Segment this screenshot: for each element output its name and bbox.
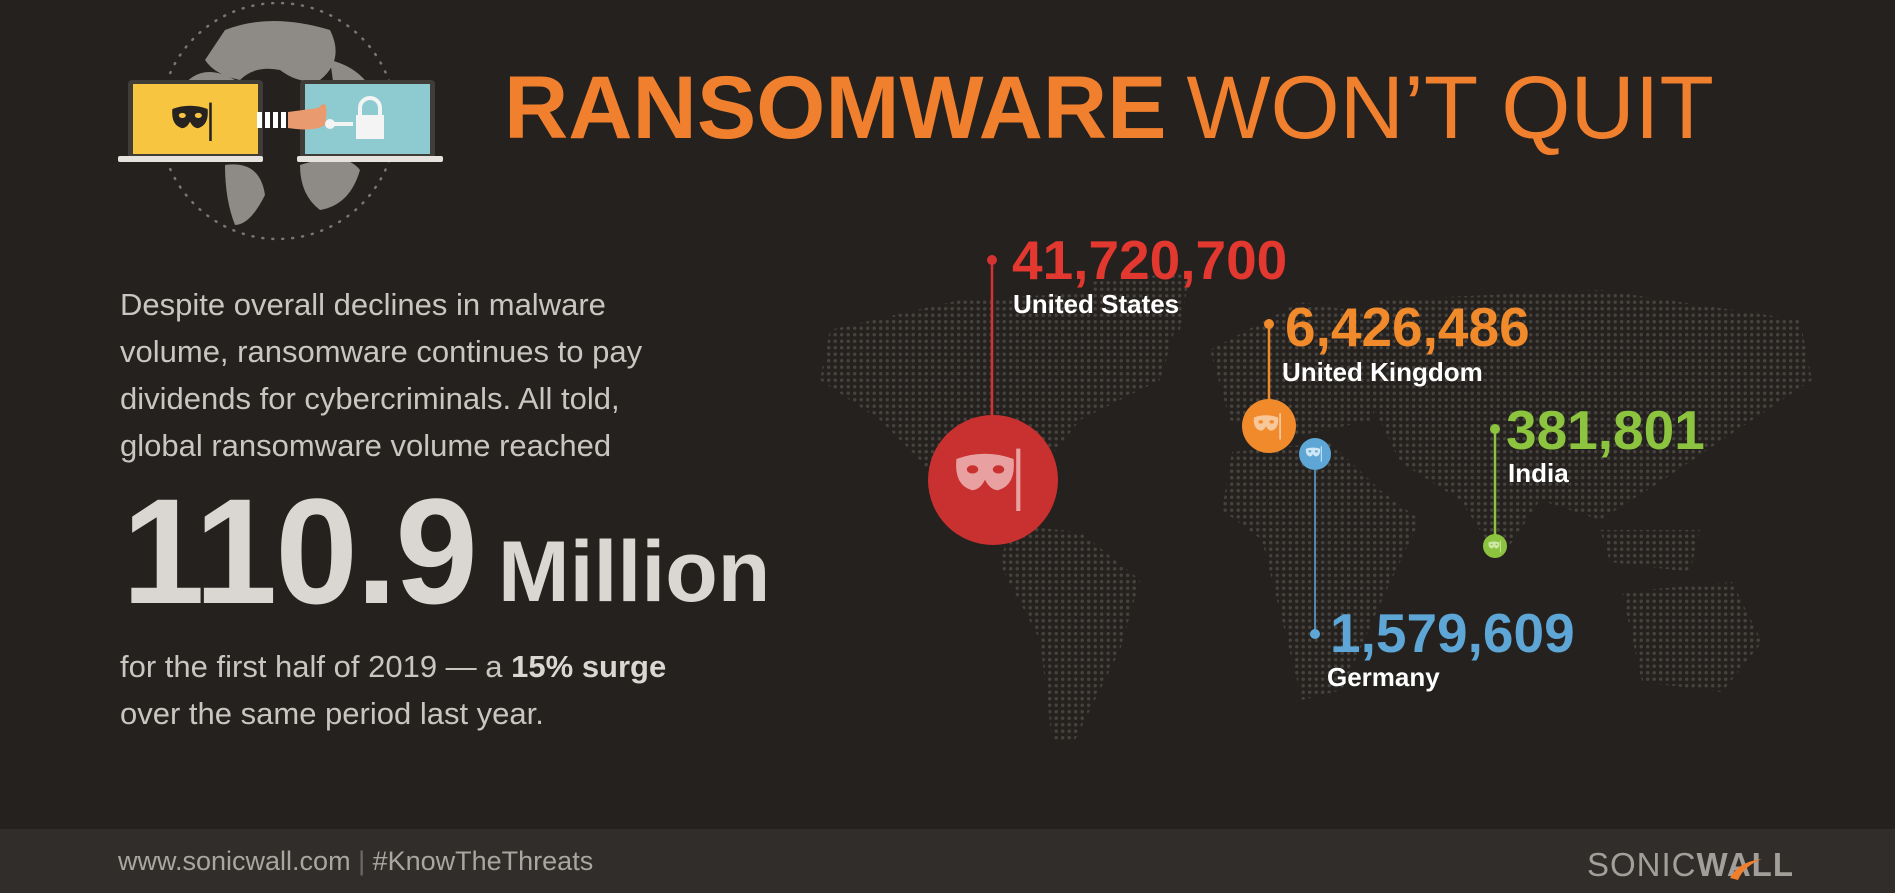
footer: www.sonicwall.com | #KnowTheThreats [117, 846, 593, 876]
marker: Germany: Germany [1327, 662, 1440, 692]
marker: United Kingdom [1242, 296, 1530, 453]
marker: India: 381,801 [1506, 399, 1705, 461]
marker: United States [928, 229, 1287, 545]
big stat: Million [498, 524, 770, 620]
marker: United Kingdom: United Kingdom [1282, 357, 1483, 387]
closing text [120, 649, 666, 731]
title: RANSOMWAREWON’T QUIT [504, 57, 1714, 157]
intro paragraph [120, 287, 643, 463]
closing text: over the same period last year. [120, 696, 544, 731]
marker: Germany [1299, 438, 1575, 692]
hand with key [257, 104, 353, 129]
intro paragraph: volume, ransomware continues to pay [120, 334, 643, 369]
big stat [122, 467, 770, 635]
dotted world map [820, 274, 1812, 740]
intro paragraph: Despite overall declines in malware [120, 287, 606, 322]
right laptop [297, 80, 443, 162]
marker: India [1483, 399, 1705, 558]
footer [0, 829, 1895, 893]
big stat: 110.9 [122, 467, 476, 635]
icon: globe with laptops [118, 3, 443, 239]
logo: SonicWall: SONICWALL [1587, 846, 1794, 883]
marker: India: India [1508, 458, 1569, 488]
closing text: for the first half of 2019 — a 15% surge [120, 649, 666, 684]
marker: United States: 41,720,700 [1012, 229, 1287, 291]
intro paragraph: global ransomware volume reached [120, 428, 611, 463]
intro paragraph: dividends for cybercriminals. All told, [120, 381, 620, 416]
marker: Germany: 1,579,609 [1330, 602, 1575, 664]
marker: United Kingdom: 6,426,486 [1285, 296, 1530, 358]
left laptop [118, 80, 263, 162]
marker: United States: United States [1013, 289, 1179, 319]
